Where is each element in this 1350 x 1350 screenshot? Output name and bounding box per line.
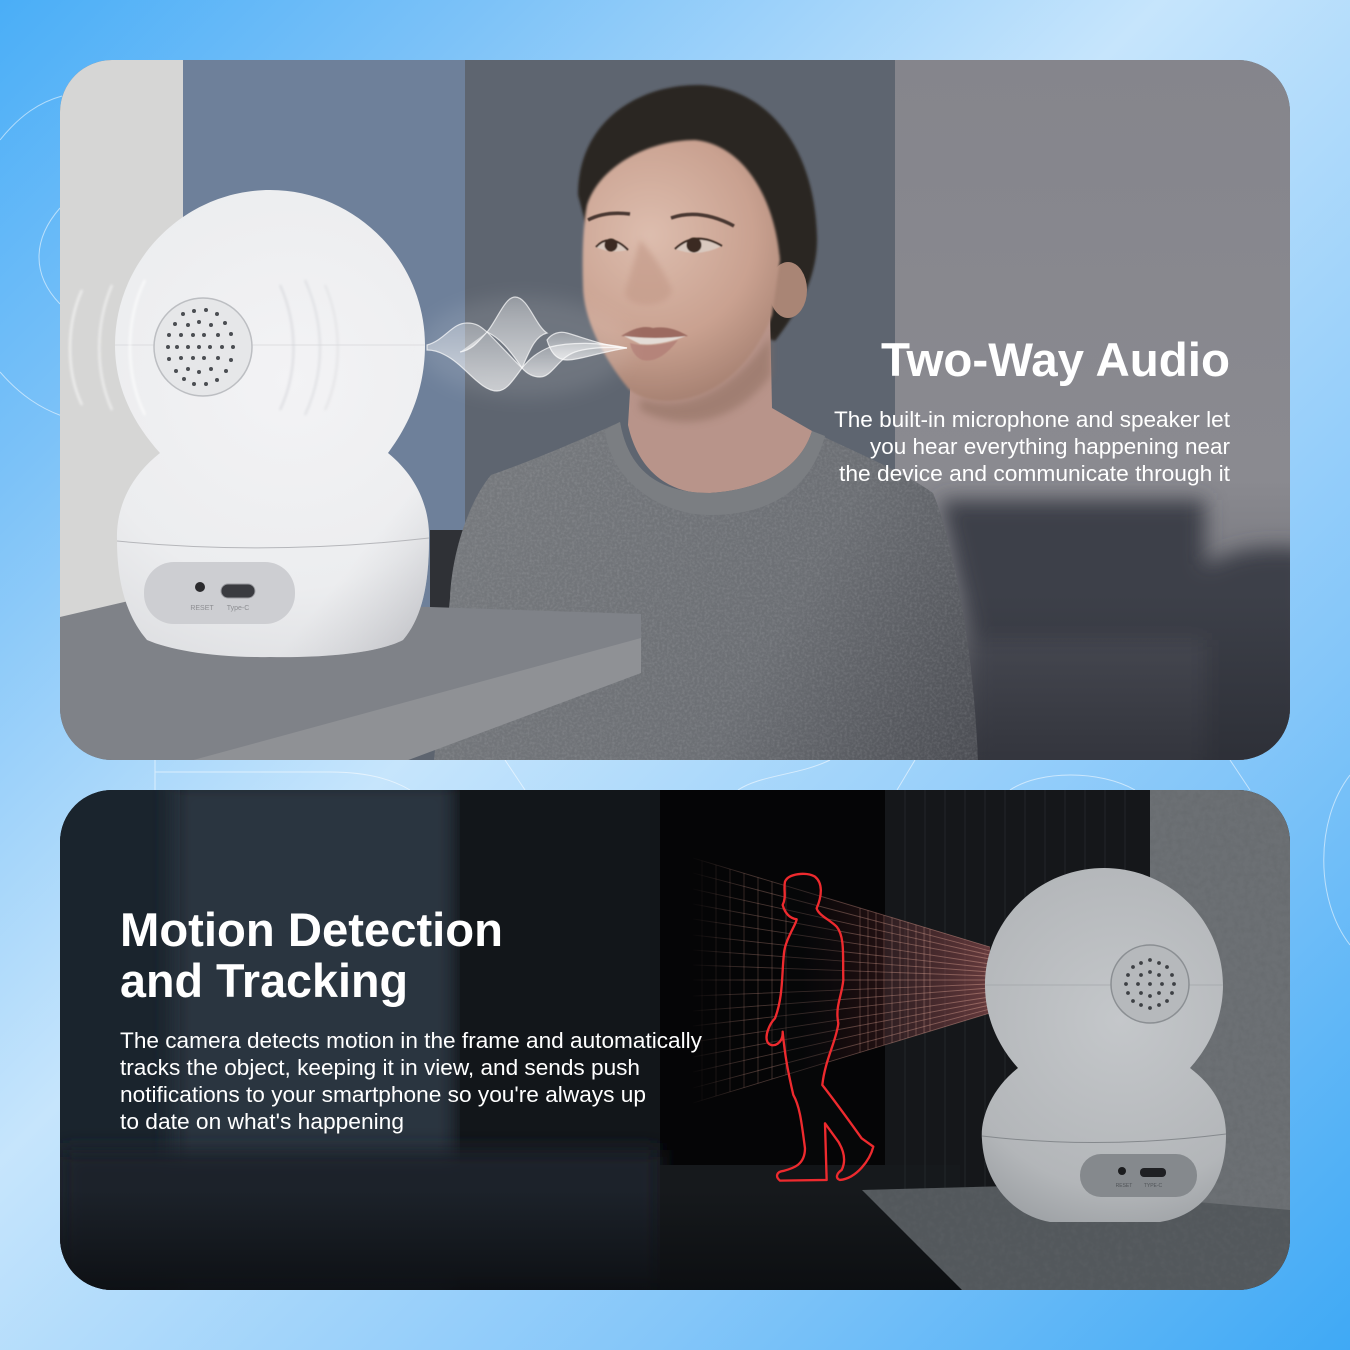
heading: motion detection and tracking: Motion Detection — [120, 903, 503, 956]
panel: motion detection — [60, 780, 1290, 1300]
hair — [578, 85, 817, 341]
text block: two-way audio description: The built-in microphone and speaker let — [834, 407, 1231, 432]
sound arcs — [70, 280, 338, 415]
neck — [628, 310, 812, 493]
person outline — [767, 874, 873, 1181]
camera body — [115, 190, 429, 657]
sweater — [434, 422, 978, 760]
port recess — [144, 562, 295, 624]
camera — [70, 190, 429, 657]
text block: motion detection description: tracks the object, keeping it in view, and sends push — [120, 1055, 640, 1080]
port recess: RESET — [190, 605, 214, 612]
text block: motion detection description: The camera detects motion in the frame and automatically — [120, 1028, 703, 1053]
text block: two-way audio description: the device and communicate through it — [839, 461, 1231, 486]
decorative outlines — [0, 96, 1350, 945]
panel bottom shading — [966, 633, 1290, 760]
port recess: Type-C — [227, 605, 249, 612]
heading: motion detection and tracking — [120, 903, 503, 1007]
dark room background — [60, 780, 1290, 1300]
detection beam — [698, 860, 990, 1102]
text block: motion detection description: to date on what's happening — [120, 1109, 404, 1134]
woman — [434, 85, 978, 760]
speaker grille — [154, 298, 252, 396]
port recess: RESET — [1116, 1183, 1132, 1189]
shelf — [862, 1186, 1290, 1290]
speaker grille — [1111, 945, 1189, 1023]
ear — [769, 262, 807, 318]
text block: motion detection description — [120, 1028, 703, 1134]
vertical wall slats — [905, 790, 1125, 1190]
camera, rear view — [982, 868, 1226, 1222]
mouth — [621, 327, 688, 361]
text block: motion detection description: notifications to your smartphone so you're always up — [120, 1082, 646, 1107]
panel: two-way audio — [60, 60, 1310, 780]
room background — [60, 60, 1290, 760]
table — [60, 600, 641, 770]
nose — [626, 242, 670, 304]
port recess: TYPE-C — [1144, 1183, 1163, 1189]
port recess — [1080, 1154, 1197, 1197]
heading: motion detection and tracking: and Tracking — [120, 954, 408, 1007]
chin shadow — [640, 335, 771, 422]
face — [583, 140, 780, 401]
text block: two-way audio description — [834, 407, 1231, 486]
sofa — [940, 500, 1310, 780]
heading: two-way audio: Two-Way Audio — [881, 333, 1230, 386]
eyes and brows — [588, 213, 734, 253]
sound wave — [420, 297, 630, 397]
text block: two-way audio description: you hear everything happening near — [870, 434, 1231, 459]
